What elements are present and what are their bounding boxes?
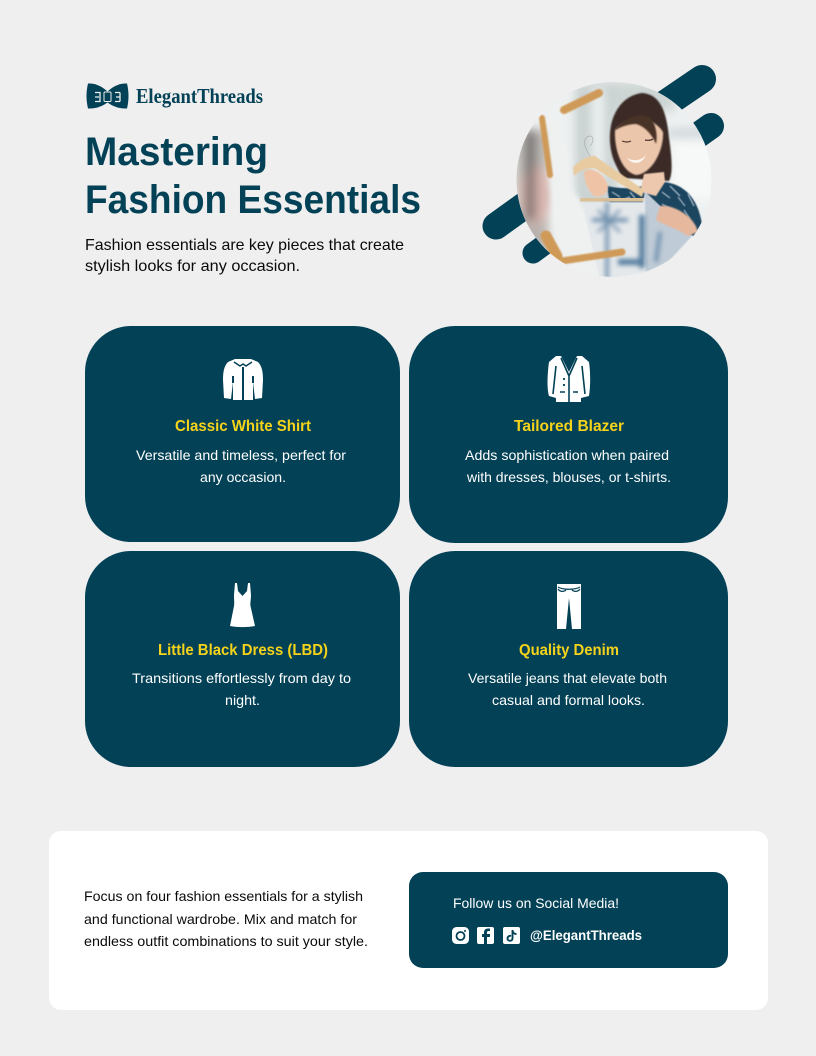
description: with dresses, blouses, or t-shirts. (466, 469, 671, 485)
social media box (409, 872, 728, 968)
social handle: @ElegantThreads (530, 927, 642, 943)
infographic page (49, 65, 768, 1010)
description: any occasion. (200, 469, 286, 485)
panel: Tailored Blazer (409, 326, 728, 543)
summary text: endless outfit combinations to suit your style. (84, 933, 368, 949)
title: Fashion Essentials (85, 178, 421, 222)
photo: woman choosing a garment (516, 82, 718, 285)
icon: blazer (548, 356, 590, 402)
icon: jeans (557, 584, 581, 629)
hands (584, 170, 608, 197)
tie-dye garment (583, 192, 661, 277)
panel: Classic White Shirt (85, 326, 400, 542)
description: Versatile and timeless, perfect for (136, 447, 346, 463)
icon: shirt (223, 359, 263, 400)
icon: dress (230, 583, 255, 627)
decorative bars behind photo (496, 79, 711, 253)
heading: Little Black Dress (LBD) (158, 642, 328, 659)
icon: tiktok (503, 927, 520, 944)
description (468, 670, 667, 708)
logo wordmark: ElegantThreads (136, 84, 263, 108)
description: night. (225, 692, 260, 708)
wooden rack (542, 93, 622, 261)
panel: Quality Denim (409, 551, 728, 767)
heading: Classic White Shirt (175, 418, 311, 435)
left blurred garment (547, 128, 583, 211)
description: Versatile jeans that elevate both (468, 670, 667, 686)
title (85, 130, 421, 222)
description (465, 447, 671, 485)
panel: Little Black Dress (85, 551, 400, 767)
hanger (573, 156, 644, 197)
intro text: Fashion essentials are key pieces that create (85, 237, 404, 254)
description (132, 670, 351, 708)
blurred background window (516, 82, 718, 260)
footer panel (49, 831, 768, 1010)
social heading: Follow us on Social Media! (453, 895, 619, 911)
summary text: Focus on four fashion essentials for a stylish (84, 888, 363, 904)
description: Adds sophistication when paired (465, 447, 669, 463)
intro text (85, 237, 404, 275)
heading: Tailored Blazer (514, 418, 624, 435)
icon: bow tie (86, 83, 128, 109)
logo: ElegantThreads (86, 83, 263, 109)
description: Transitions effortlessly from day to (132, 670, 351, 686)
summary text: and functional wardrobe. Mix and match for (84, 911, 357, 927)
hair (610, 93, 672, 181)
icon: instagram (452, 927, 469, 944)
intro text: stylish looks for any occasion. (85, 258, 300, 275)
heading: Quality Denim (519, 642, 619, 659)
description: casual and formal looks. (492, 692, 645, 708)
description (136, 447, 346, 485)
neck and blouse (607, 182, 702, 236)
summary text (84, 888, 368, 949)
face (615, 119, 663, 175)
icon: facebook (477, 927, 494, 944)
title: Mastering (85, 130, 268, 174)
